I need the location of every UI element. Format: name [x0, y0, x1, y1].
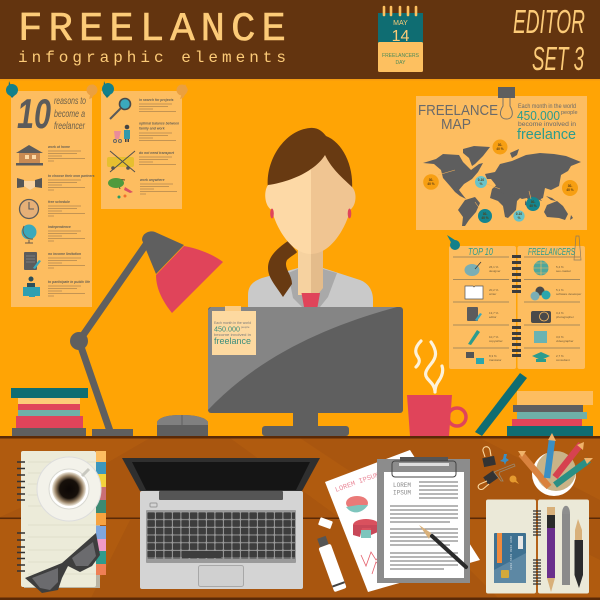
- notebook: top 10 freelancers: [447, 235, 585, 369]
- poster headline: reasons to: [54, 96, 86, 107]
- spiral binding: [512, 255, 521, 357]
- right page values: 5,1 %: [556, 288, 564, 292]
- arm: [79, 243, 147, 431]
- sticky note: Each month in the world: [214, 321, 251, 325]
- reason texts: independence: [48, 225, 71, 229]
- binder clip: [498, 87, 515, 119]
- icon: stroller and parent: [114, 125, 130, 142]
- map statistic: 450.000: [517, 108, 560, 123]
- icon: notepad: [24, 252, 41, 270]
- document text: IPSUM: [393, 490, 411, 496]
- poster: freelance map: [416, 87, 587, 230]
- icon: people: [23, 276, 40, 297]
- right page values: [556, 265, 581, 362]
- right page values: 3,0 %: [556, 335, 564, 339]
- keyboard: [146, 510, 296, 563]
- sunglasses: [25, 533, 100, 593]
- earrings: [270, 208, 351, 218]
- power button: [150, 503, 157, 507]
- reason texts: to participate in public life: [48, 280, 90, 284]
- map markers: 40 %: [566, 188, 574, 192]
- body: [248, 268, 373, 307]
- map statistic: become involved in: [518, 121, 576, 128]
- left page values: copywriter: [489, 339, 503, 343]
- laptop: [122, 458, 320, 589]
- stand: [293, 412, 318, 427]
- ruled lines: [453, 257, 580, 348]
- ruler: [475, 373, 527, 436]
- map statistic: freelance: [517, 127, 576, 143]
- base: [92, 429, 133, 436]
- screen: [208, 307, 403, 413]
- shade: [142, 231, 184, 274]
- left page values: 26,1 %: [489, 265, 499, 269]
- calendar icon: MAY: [393, 20, 408, 27]
- coffee mug: [407, 341, 466, 436]
- rings: [17, 462, 25, 571]
- map markers: 30-: [483, 212, 487, 216]
- report heading: LOREM IPSUM: [334, 471, 380, 495]
- book stack right: [507, 391, 593, 436]
- base: [140, 491, 303, 589]
- office clips and pins: [478, 447, 519, 489]
- left page values: translator: [489, 358, 502, 362]
- ponytail: [268, 241, 297, 297]
- right page values: 3,4 %: [556, 311, 564, 315]
- map markers: 40 %: [481, 216, 489, 220]
- sticky note: become involved in: [214, 333, 251, 337]
- sticky note: 450.000: [214, 324, 240, 334]
- donut chart: [353, 519, 379, 538]
- left page values: 13,7 %: [489, 311, 499, 315]
- left page values: writer: [489, 292, 496, 296]
- steam: [416, 341, 443, 392]
- icon: clock: [20, 200, 38, 218]
- book stack left: [11, 388, 88, 436]
- cap: [318, 517, 333, 529]
- neck: [298, 245, 311, 295]
- push pins: [102, 81, 188, 99]
- face: [265, 169, 311, 254]
- freelancer woman: [248, 128, 373, 307]
- reason texts: to choose their own partners: [48, 174, 95, 178]
- icon: magnifier: [110, 98, 130, 119]
- benefit texts: family and work: [139, 126, 166, 130]
- document lines: [390, 482, 458, 569]
- pencil cup: [518, 433, 593, 496]
- right page values: seo-master: [556, 269, 571, 273]
- clipboard: [377, 457, 470, 583]
- map title: MAP: [441, 116, 471, 133]
- sticky note: people: [241, 325, 250, 329]
- map markers: 30-: [498, 143, 502, 147]
- icon: house: [16, 145, 43, 166]
- icon: palm and rocket: [108, 178, 133, 198]
- calendar icon: [378, 7, 423, 72]
- hair: [268, 128, 352, 200]
- benefit texts: work anywhere: [140, 178, 165, 182]
- poster: benefits: [101, 81, 188, 209]
- editor label: [513, 3, 585, 77]
- benefit texts: [139, 98, 179, 194]
- wooden desk: [0, 436, 600, 600]
- benefit texts: optimal balance between: [139, 122, 179, 126]
- sticky note: freelance: [214, 336, 251, 346]
- map markers: %: [518, 216, 521, 220]
- icon: handshake: [17, 178, 42, 190]
- left page values: 10,7 %: [489, 335, 499, 339]
- sticky note: [212, 306, 256, 355]
- pencils: [521, 440, 589, 487]
- icon: crossed bus: [107, 151, 135, 172]
- clip: [392, 457, 456, 477]
- map markers: 30-: [429, 178, 433, 182]
- open notebook with pens: [486, 500, 589, 594]
- spiral notebook with coffee: [17, 451, 106, 593]
- map markers: 30-: [568, 184, 572, 188]
- fountain pen: [419, 525, 466, 567]
- page headings: [468, 246, 575, 258]
- right page values: software developer: [556, 292, 581, 296]
- icon: globe: [22, 224, 36, 243]
- usb stick: [315, 517, 347, 592]
- map markers: [423, 140, 578, 223]
- big ten: 10: [17, 90, 51, 137]
- calendar icon: 14: [392, 28, 410, 45]
- map markers: 30-: [531, 200, 535, 204]
- right page icons: [530, 260, 551, 362]
- reason texts: no income limitation: [48, 252, 81, 256]
- map title: FREELANCE: [418, 102, 498, 119]
- left page values: [489, 265, 503, 362]
- joint: [70, 332, 88, 350]
- black fountain pen: [574, 519, 583, 588]
- map title: [418, 102, 498, 133]
- map markers: 0-10: [478, 178, 484, 182]
- printed report sheet: [325, 450, 480, 592]
- right page values: 5,4 %: [556, 265, 564, 269]
- push pins: [6, 81, 98, 99]
- right page values: 2,7 %: [556, 354, 564, 358]
- pin: [447, 235, 460, 250]
- desk lamp: [70, 231, 223, 436]
- shirt: [302, 293, 320, 307]
- map markers: 40 %: [427, 182, 435, 186]
- left page values: 20,2 %: [489, 288, 499, 292]
- world map: [423, 146, 581, 226]
- touchpad: [198, 566, 244, 586]
- right page values: consultant: [556, 358, 570, 362]
- bank card: 1234 5678 9012 3456: [510, 536, 513, 570]
- title: FREELANCE: [18, 7, 286, 53]
- benefit texts: do not need transport: [139, 151, 175, 155]
- left page values: 8,3 %: [489, 354, 497, 358]
- reason texts: work at home: [48, 145, 70, 149]
- pie chart: [346, 496, 368, 512]
- map statistic: [517, 103, 578, 143]
- poster headline: become a: [54, 109, 85, 120]
- page tabs: [96, 451, 106, 575]
- header band: [0, 0, 600, 80]
- mouse: [157, 415, 208, 436]
- paper clip: [574, 236, 581, 260]
- left page values: designer: [489, 269, 501, 273]
- line chart: [361, 552, 382, 574]
- poster: 10 reasons: [6, 81, 98, 307]
- monitor: [208, 306, 403, 436]
- map statistic: Each month in the world: [518, 103, 576, 110]
- spiral: [533, 511, 541, 584]
- map markers: %: [480, 182, 483, 186]
- document text: [393, 482, 411, 496]
- calendar icon: FREELANCERS: [382, 53, 420, 59]
- subtitle: infographic elements: [18, 49, 286, 67]
- poster headline: [54, 96, 86, 132]
- calendar icon: DAY: [396, 60, 406, 66]
- left page icons: [464, 262, 484, 364]
- benefit texts: in search for projects: [139, 98, 174, 102]
- silver pen: [562, 506, 570, 585]
- screen: [122, 458, 320, 491]
- coffee cup: [37, 457, 101, 521]
- left page values: editor: [489, 315, 497, 319]
- page headings: TOP 10: [468, 246, 493, 258]
- document text: LOREM: [393, 482, 411, 489]
- reason texts: [48, 145, 95, 296]
- collar: [288, 269, 337, 307]
- poster headline: freelancer: [54, 121, 85, 132]
- right page values: videographer: [556, 339, 574, 343]
- map markers: 40 %: [496, 147, 504, 151]
- map markers: 40 %: [529, 204, 537, 208]
- map statistic: people: [561, 110, 578, 116]
- purple pen: [547, 507, 555, 592]
- right page values: photographer: [556, 315, 574, 319]
- map markers: 0-10: [516, 212, 522, 216]
- reason texts: free schedule: [48, 200, 70, 204]
